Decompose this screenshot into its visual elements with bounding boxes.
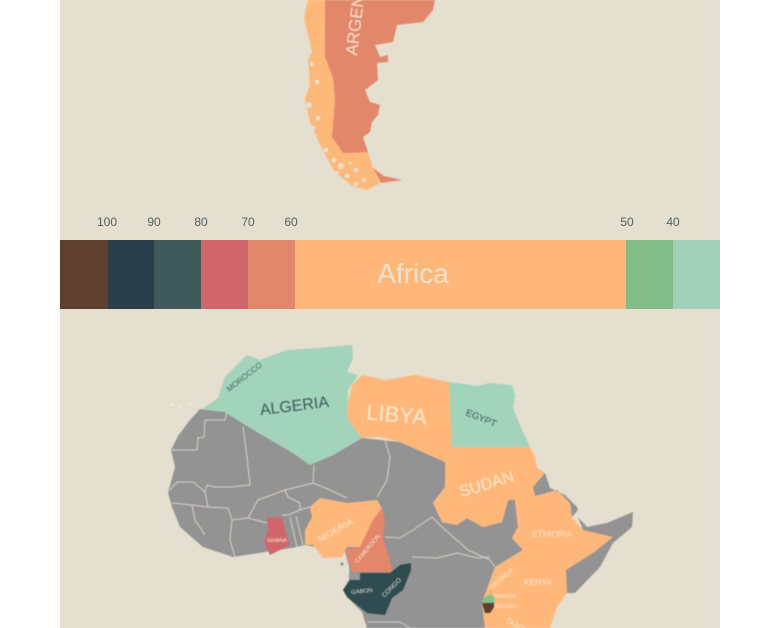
label 60: 60	[284, 215, 298, 229]
label: Ghana: GHANA	[267, 538, 287, 544]
label 90: 90	[147, 215, 161, 229]
label: Ethiopia: ETHIOPIA	[532, 529, 572, 539]
swatch 40	[673, 240, 720, 309]
label 100: 100	[97, 215, 117, 229]
swatch 50	[626, 240, 673, 309]
label 50: 50	[620, 215, 634, 229]
swatch 80	[154, 240, 201, 309]
islands: Cape Verde	[170, 403, 191, 407]
swatch 100	[60, 240, 108, 309]
label 70: 70	[241, 215, 255, 229]
label: Congo: CONGO	[381, 577, 403, 599]
label: Egypt: EGYPT	[464, 408, 498, 430]
label: Morocco: MOROCCO	[225, 360, 264, 394]
label: Sudan: SUDAN	[457, 468, 516, 501]
countries: Somalia	[566, 512, 633, 593]
scale labels	[97, 215, 680, 229]
swatch 90	[108, 240, 154, 309]
country: Rwanda	[482, 594, 495, 603]
country: Burundi	[482, 603, 495, 613]
country: Ghana	[264, 517, 290, 555]
countries: Sudan, Ethiopia, Kenya, Uganda, Tanzania	[433, 447, 613, 628]
map: Africa	[168, 345, 633, 628]
countries: Gabon and Congo	[343, 563, 411, 615]
swatch Africa	[295, 240, 626, 309]
gray countries	[168, 409, 523, 628]
label: Kenya: KENYA	[524, 577, 552, 587]
country: Nigeria	[305, 498, 383, 558]
label: Nigeria: NIGERIA	[316, 516, 356, 545]
country: Libya	[347, 375, 452, 462]
label: Uganda: UGANDA	[489, 567, 515, 590]
label 80: 80	[194, 215, 208, 229]
label: Cameroon: CAMEROON	[355, 534, 382, 565]
country: Eritrea	[533, 473, 578, 517]
map: southern tip of South America	[304, 0, 435, 190]
country: Egypt	[449, 382, 530, 447]
swatch 60	[248, 240, 295, 309]
island: Sao Tome	[340, 562, 344, 566]
bar title: Africa	[377, 258, 449, 289]
country: Cameroon	[345, 508, 393, 572]
country: Argentina	[325, 0, 435, 183]
gray country borders	[170, 412, 495, 628]
label: Burundi: BURUNDI	[494, 604, 516, 610]
label: Gabon: GABON	[351, 588, 373, 596]
coastline fragments	[304, 54, 366, 186]
label: Algeria: ALGERIA	[259, 394, 330, 419]
legend bar	[60, 240, 720, 309]
label: Libya: LIBYA	[365, 399, 428, 430]
label 40: 40	[666, 215, 680, 229]
country: Algeria and Morocco	[202, 345, 362, 465]
label: Rwanda: RWANDA	[494, 594, 517, 600]
swatch 70	[201, 240, 248, 309]
country: Equatorial Guinea	[349, 573, 360, 580]
country: Chile	[304, 0, 380, 190]
